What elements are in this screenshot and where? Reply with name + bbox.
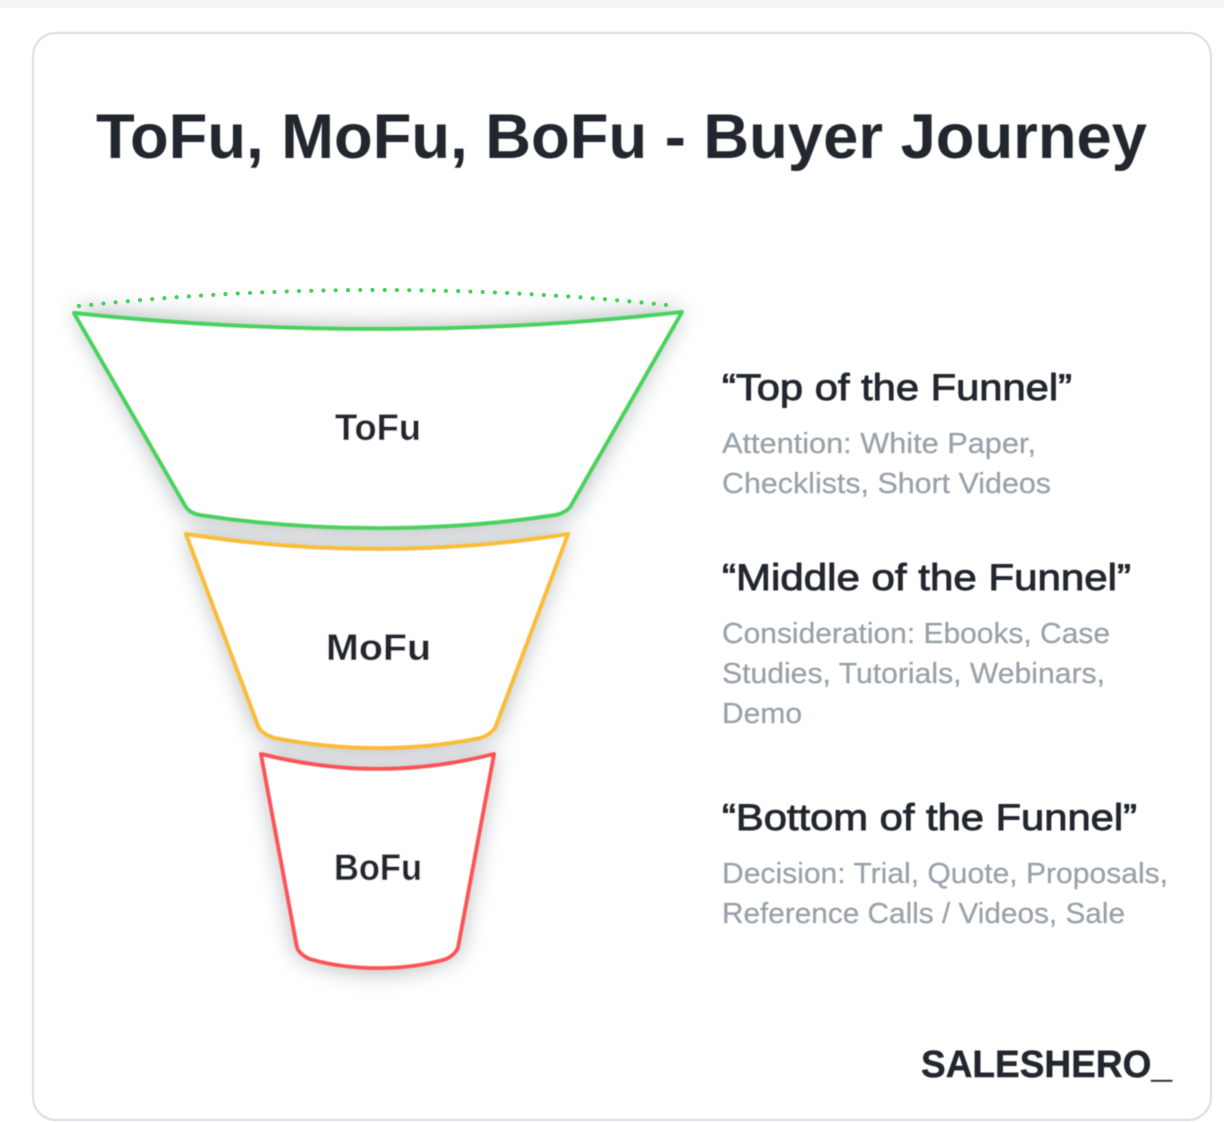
- text block: middle of the funnel: [722, 557, 1131, 730]
- title: ToFu, MoFu, BoFu - Buyer Journey: [96, 102, 1147, 172]
- funnel stage: ToFu: [74, 312, 682, 528]
- funnel rim: dotted ellipse: [79, 290, 676, 306]
- funnel stage: ToFu: ToFu: [335, 407, 421, 448]
- funnel stage: BoFu: BoFu: [334, 847, 422, 888]
- text block: top of the funnel: Checklists, Short Videos: [722, 468, 1051, 500]
- text block: top of the funnel: “Top of the Funnel”: [722, 367, 1072, 408]
- shadows: [74, 309, 682, 972]
- funnel stage: MoFu: MoFu: [326, 627, 431, 668]
- text block: top of the funnel: Attention: White Paper,: [722, 428, 1036, 460]
- text block: bottom of the funnel: [722, 797, 1168, 930]
- text block: bottom of the funnel: Decision: Trial, Quote, Proposals,: [722, 858, 1168, 890]
- funnel stage: BoFu: [261, 754, 494, 968]
- text block: middle of the funnel: Studies, Tutorials, Webinars,: [722, 658, 1105, 690]
- text block: middle of the funnel: “Middle of the Funnel”: [722, 557, 1131, 598]
- text block: bottom of the funnel: Reference Calls / Videos, Sale: [722, 898, 1125, 930]
- text block: bottom of the funnel: “Bottom of the Funnel”: [722, 797, 1137, 838]
- funnel diagram: [74, 290, 682, 972]
- text block: middle of the funnel: Demo: [722, 698, 802, 730]
- funnel stage: MoFu: [186, 534, 568, 748]
- logo: SalesHero: SALESHERO_: [921, 1044, 1173, 1086]
- text block: top of the funnel: [722, 367, 1072, 500]
- text block: middle of the funnel: Consideration: Ebooks, Case: [722, 618, 1110, 650]
